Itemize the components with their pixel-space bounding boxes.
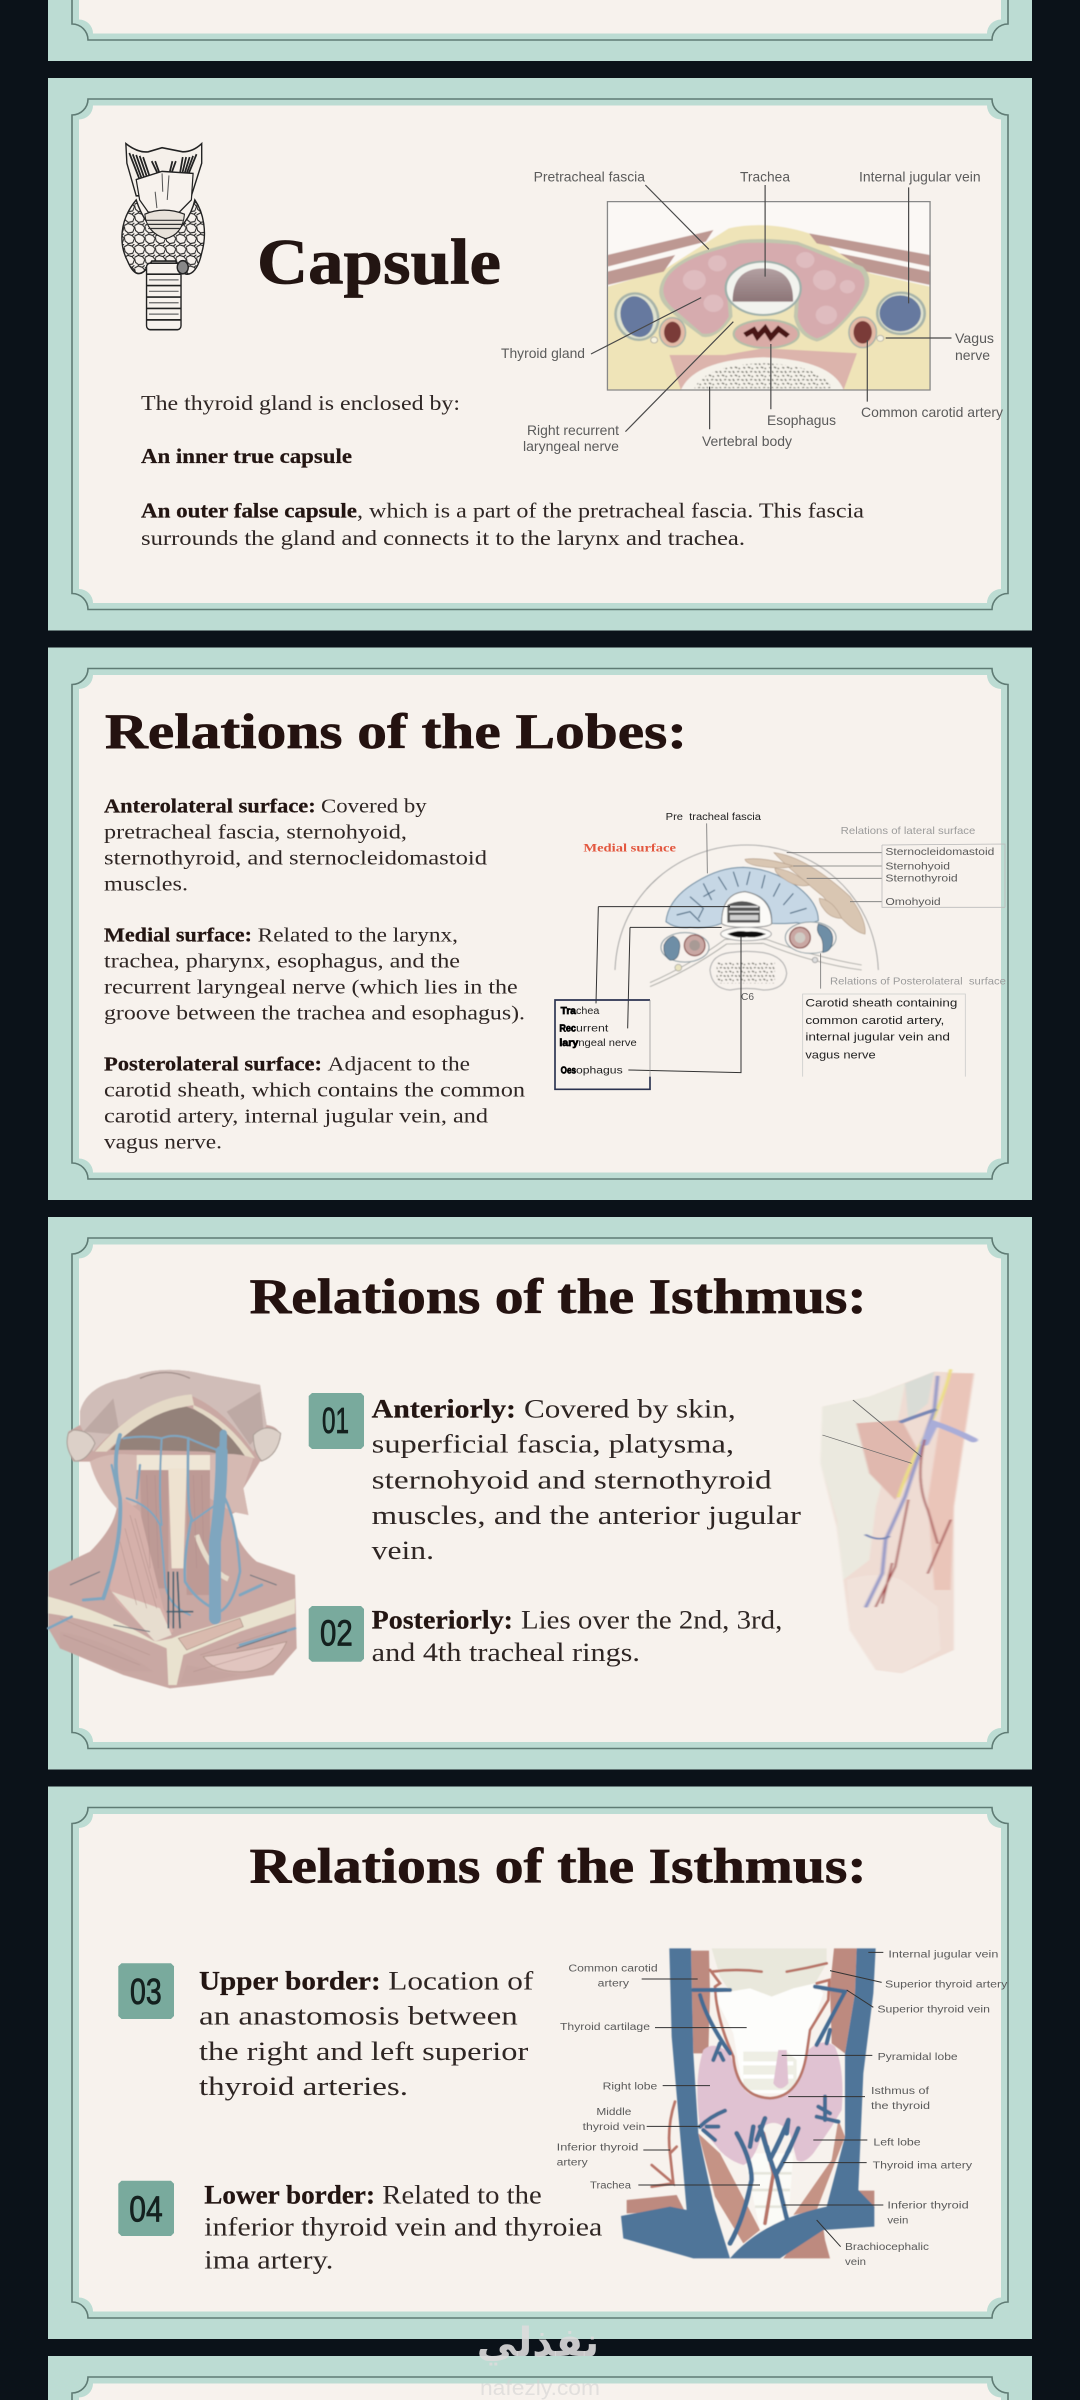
text block: lower border: ima artery. xyxy=(204,2245,333,2274)
text block: posteriorly: Lies over the 2nd, 3rd, xyxy=(521,1605,782,1634)
text block: upper border: thyroid arteries. xyxy=(199,2072,408,2101)
labels: right side: Thyroid ima artery xyxy=(873,2161,972,2172)
text block: posteriorly: and 4th tracheal rings. xyxy=(372,1638,640,1667)
text block: surfaces of the lobes: Adjacent to the xyxy=(328,1054,470,1076)
labels: lateral surface relations: Relations of lateral surface xyxy=(841,826,975,837)
text block: surfaces of the lobes: Medial surface: xyxy=(104,925,252,947)
labels: medial surface relations: urrent xyxy=(576,1023,609,1034)
icon: thyroid and larynx sketch xyxy=(122,144,204,330)
labels: right side: Superior thyroid artery xyxy=(885,1980,1007,1991)
label: C6: C6 xyxy=(741,992,754,1003)
badge: 03 xyxy=(118,1963,174,2019)
labels: right side: the thyroid xyxy=(871,2101,930,2112)
panel: next slide (cropped) xyxy=(48,2356,1032,2400)
label: pre-tracheal fascia: Pre tracheal fascia xyxy=(666,812,761,823)
labels: right side: Internal jugular vein xyxy=(888,1949,998,1960)
text block: lower border: inferior thyroid vein and thyroiea xyxy=(204,2213,603,2242)
labels: left side: Right lobe xyxy=(603,2081,658,2092)
diagram: neck cross-section with capsule: nerve xyxy=(955,348,990,363)
labels: left side: Inferior thyroid xyxy=(557,2143,638,2154)
diagram: neck cross-section with capsule: Vertebral body xyxy=(702,434,792,449)
diagram: anterior neck with thyroid xyxy=(557,1948,1007,2268)
watermark: nafezly.com xyxy=(480,2377,600,2400)
labels: left side: artery xyxy=(557,2158,588,2169)
text block: surfaces of the lobes: vagus nerve. xyxy=(104,1131,222,1153)
heading: Relations of the Isthmus: xyxy=(250,1268,867,1324)
text block: lower border xyxy=(204,2180,603,2274)
text block: anteriorly: superficial fascia, platysma, xyxy=(372,1430,734,1459)
badge: 02: 02 xyxy=(320,1613,353,1654)
labels: lateral surface relations xyxy=(841,826,994,908)
text block: upper border: the right and left superior xyxy=(199,2037,529,2066)
text block: capsule description: An outer false capsule xyxy=(141,498,357,522)
badge: 02 xyxy=(309,1606,364,1662)
badge: 01: 01 xyxy=(322,1400,349,1441)
text block: upper border xyxy=(199,1966,534,2101)
badge: 01 xyxy=(309,1393,364,1449)
text block: capsule description: surrounds the gland and connects it to the larynx and trachea. xyxy=(141,526,745,550)
labels: posterolateral surface relations: vagus nerve xyxy=(805,1049,876,1061)
text block: surfaces of the lobes: Covered by xyxy=(321,796,427,818)
labels: right side: vein xyxy=(887,2215,908,2226)
labels: right side: Pyramidal lobe xyxy=(878,2052,958,2063)
text block: surfaces of the lobes: sternothyroid, and sternocleidomastoid xyxy=(104,847,487,869)
diagram: neck cross-section with capsule: Right recurrent xyxy=(527,423,619,438)
labels: medial surface relations: chea xyxy=(576,1006,600,1017)
labels: medial surface relations: Tra xyxy=(561,1006,576,1017)
text block: anteriorly: muscles, and the anterior jugular xyxy=(372,1501,801,1530)
labels: right side: Superior thyroid vein xyxy=(877,2005,990,2016)
badge: 04 xyxy=(118,2181,174,2236)
badge: 04: 04 xyxy=(129,2189,163,2230)
text block: capsule description: , which is a part of the pretracheal fascia. This fascia xyxy=(357,498,865,522)
labels: right side: vein xyxy=(845,2257,866,2268)
text block: surfaces of the lobes: trachea, pharynx, esophagus, and the xyxy=(104,951,460,973)
text block: lower border: Related to the xyxy=(382,2180,542,2209)
text block: capsule description: The thyroid gland is enclosed by: xyxy=(141,391,460,415)
text block: surfaces of the lobes: Related to the larynx, xyxy=(258,925,458,947)
text block: posteriorly: Posteriorly: xyxy=(372,1605,513,1634)
labels: posterolateral surface relations: Relations of Posterolateral surface xyxy=(830,976,1006,987)
text block: lower border: Lower border: xyxy=(204,2180,375,2209)
text block: surfaces of the lobes: carotid artery, internal jugular vein, and xyxy=(104,1106,488,1128)
text block: capsule description: An inner true capsule xyxy=(141,444,352,468)
text block: surfaces of the lobes: groove between the trachea and esophagus). xyxy=(104,1002,525,1024)
labels: medial surface relations: ophagus xyxy=(576,1065,623,1076)
text block: upper border: Location of xyxy=(388,1966,534,1995)
labels: medial surface relations xyxy=(559,1006,637,1076)
panel: relations of the lobes xyxy=(48,648,1032,1200)
watermark xyxy=(477,2320,600,2400)
text block: surfaces of the lobes: Posterolateral surface: xyxy=(104,1054,322,1076)
text block: anteriorly: sternohyoid and sternothyroid xyxy=(372,1465,772,1494)
panel: previous slide (cropped) xyxy=(48,0,1032,61)
text block: surfaces of the lobes: muscles. xyxy=(104,873,188,895)
text block: upper border: Upper border: xyxy=(199,1966,381,1995)
text block: surfaces of the lobes: carotid sheath, which contains the common xyxy=(104,1080,525,1102)
text block: capsule description xyxy=(141,391,865,550)
text block: surfaces of the lobes xyxy=(104,796,525,1153)
panel: relations of the isthmus, anterior and posterior xyxy=(48,1217,1032,1770)
labels: right side xyxy=(845,1949,1007,2268)
labels: right side: Isthmus of xyxy=(871,2086,929,2097)
labels: left side: Middle xyxy=(596,2107,632,2118)
diagram: neck cross-section with capsule: Common carotid artery xyxy=(861,405,1003,420)
labels: posterolateral surface relations: common carotid artery, xyxy=(805,1015,944,1027)
label: medial surface: Medial surface xyxy=(583,840,677,854)
text block: anteriorly: vein. xyxy=(372,1536,434,1565)
labels: medial surface relations: Rec xyxy=(559,1023,576,1034)
diagram: neck cross-section with capsule: Internal jugular vein xyxy=(859,170,981,185)
labels: right side: Brachiocephalic xyxy=(845,2242,929,2253)
labels: posterolateral surface relations: internal jugular vein and xyxy=(805,1032,950,1044)
labels: left side: Trachea xyxy=(590,2180,631,2191)
text block: upper border: an anastomosis between xyxy=(199,2001,518,2030)
heading: Relations of the Lobes: xyxy=(105,703,687,759)
diagram: neck cross-section with capsule: Pretracheal fascia xyxy=(534,170,645,185)
labels: lateral surface relations: Sternothyroid xyxy=(885,874,958,885)
title: Capsule xyxy=(257,226,501,298)
labels: left side: artery xyxy=(598,1979,629,1990)
diagram: neck cross-section with capsule xyxy=(501,170,1003,454)
labels: lateral surface relations: Sternocleidomastoid xyxy=(885,847,994,858)
labels: medial surface relations: ngeal nerve xyxy=(578,1038,637,1049)
text block: anteriorly xyxy=(372,1394,801,1565)
illustration: dissected neck xyxy=(48,1370,297,1688)
text block: anteriorly: Covered by skin, xyxy=(524,1394,736,1423)
labels: medial surface relations: Oes xyxy=(561,1065,576,1076)
diagram: neck cross-section with capsule: Vagus xyxy=(955,331,994,346)
panel: relations of the isthmus, upper and lower borders xyxy=(48,1786,1032,2339)
labels: left side xyxy=(557,1964,658,2191)
labels: left side: thyroid vein xyxy=(583,2122,645,2133)
diagram: neck cross-section with capsule: Trachea xyxy=(740,170,790,185)
diagram: neck cross-section with capsule: laryngeal nerve xyxy=(523,439,619,454)
diagram: neck cross-section with capsule: Esophagus xyxy=(767,413,836,428)
illustration: lateral neck dissection xyxy=(820,1370,975,1673)
diagram: neck cross-section with capsule: Thyroid gland xyxy=(501,346,585,361)
text block: surfaces of the lobes: pretracheal fascia, sternohyoid, xyxy=(104,822,407,844)
text block: anteriorly: Anteriorly: xyxy=(372,1394,516,1423)
labels: right side: Inferior thyroid xyxy=(887,2200,969,2211)
labels: left side: Common carotid xyxy=(568,1964,658,1975)
watermark: نفذلي xyxy=(477,2320,599,2366)
labels: lateral surface relations: Omohyoid xyxy=(885,897,941,908)
labels: posterolateral surface relations: Carotid sheath containing xyxy=(805,998,957,1010)
text block: surfaces of the lobes: recurrent laryngeal nerve (which lies in the xyxy=(104,976,518,998)
text block: surfaces of the lobes: Anterolateral surface: xyxy=(104,796,316,818)
panel: capsule xyxy=(48,78,1032,630)
labels: medial surface relations: lary xyxy=(559,1038,579,1049)
badge: 03: 03 xyxy=(130,1971,162,2012)
labels: lateral surface relations: Sternohyoid xyxy=(885,861,950,872)
text block: posteriorly xyxy=(372,1605,782,1667)
labels: posterolateral surface relations xyxy=(805,976,1006,1061)
labels: left side: Thyroid cartilage xyxy=(560,2022,651,2033)
labels: right side: Left lobe xyxy=(873,2138,921,2149)
diagram: relations of the lobes cross-section xyxy=(555,812,1006,1089)
heading: Relations of the Isthmus: xyxy=(250,1838,867,1894)
